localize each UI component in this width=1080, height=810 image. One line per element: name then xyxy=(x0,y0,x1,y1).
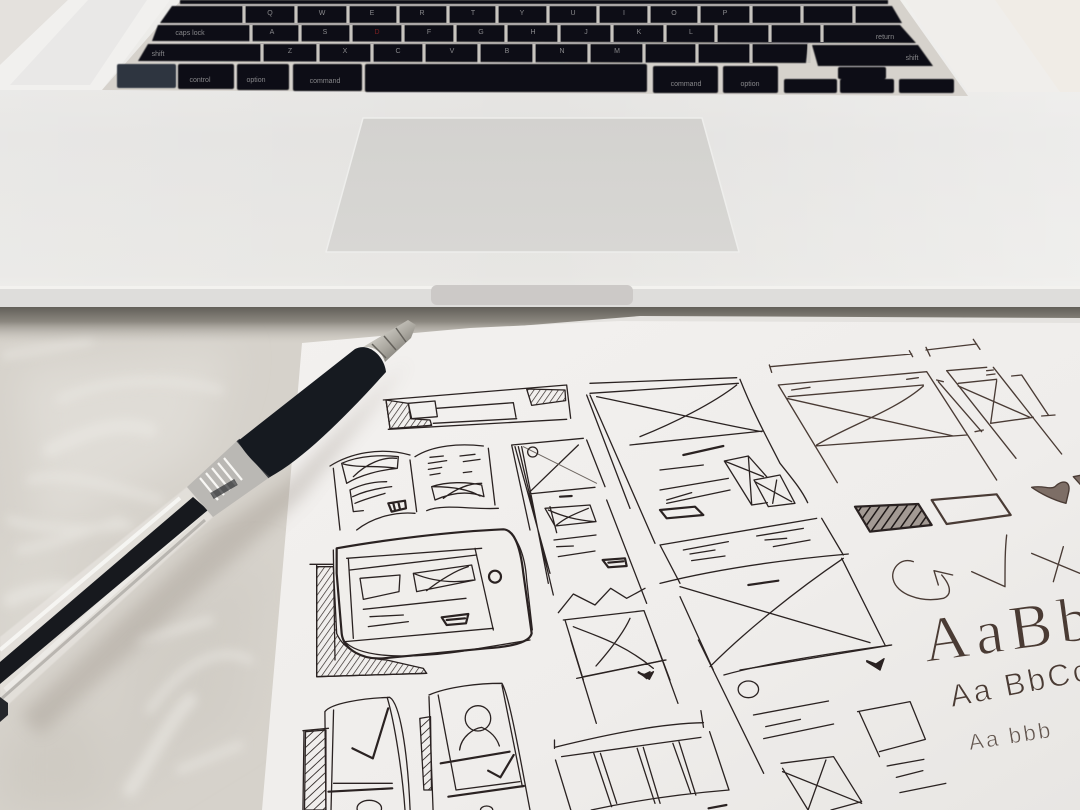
key labels: caps lock xyxy=(175,30,205,37)
key labels: P xyxy=(723,10,728,17)
type specimen: small: Aa bbb xyxy=(967,717,1054,755)
key labels: option xyxy=(246,77,266,84)
key labels: R xyxy=(419,10,425,17)
icon: check mark xyxy=(972,535,1007,587)
pen with shadow xyxy=(0,320,416,735)
key labels: U xyxy=(570,10,576,17)
sketches: bottom row xyxy=(303,640,946,810)
key labels: D xyxy=(374,29,380,36)
laptop body xyxy=(0,0,1080,307)
key labels: J xyxy=(584,29,588,36)
key labels: C xyxy=(395,48,401,55)
key labels: shift xyxy=(152,51,164,58)
sketch: mobile page column xyxy=(512,438,670,680)
keyboard xyxy=(102,0,968,96)
key labels: B xyxy=(505,48,510,55)
pen: clear barrel xyxy=(0,487,213,712)
icon: heart xyxy=(1032,475,1080,503)
key labels: T xyxy=(471,10,476,17)
key labels: Y xyxy=(520,10,525,17)
table surface xyxy=(0,305,1080,810)
key labels: shift xyxy=(906,55,918,62)
key labels: A xyxy=(270,29,275,36)
key labels: F xyxy=(427,29,431,36)
trackpad xyxy=(326,118,739,252)
key labels: I xyxy=(623,10,625,17)
key labels: O xyxy=(671,10,677,17)
key labels: E xyxy=(370,10,375,17)
sketches: left column xyxy=(310,385,670,680)
key labels: Z xyxy=(288,48,293,55)
icon: rotate arrow xyxy=(893,561,953,600)
key labels: W xyxy=(319,10,326,17)
key labels: return xyxy=(876,34,894,41)
key labels: command xyxy=(671,81,701,88)
key labels: N xyxy=(559,48,565,55)
pen: metal tip xyxy=(363,320,416,362)
key labels: X xyxy=(343,48,348,55)
key labels: M xyxy=(614,48,620,55)
key labels: control xyxy=(189,77,211,84)
icon: cross xyxy=(1032,547,1080,582)
key labels: V xyxy=(450,48,455,55)
key labels: command xyxy=(310,78,340,85)
pen: clear ribbed section xyxy=(187,440,270,517)
icon: empty rectangle xyxy=(932,494,1011,524)
key labels xyxy=(152,10,918,88)
paper sheet with wireframe sketches xyxy=(262,316,1080,810)
key labels: option xyxy=(740,81,760,88)
sketches: right column xyxy=(590,339,1080,670)
key labels: H xyxy=(530,29,536,36)
pen: rubber grip xyxy=(238,347,386,477)
icon: hatched rectangle xyxy=(855,504,932,532)
pen: ink rod xyxy=(0,497,208,684)
sketch: tablet wireframe xyxy=(317,567,427,677)
key labels: Q xyxy=(267,10,273,17)
lid notch xyxy=(431,285,633,305)
key labels: L xyxy=(689,29,693,36)
key labels: S xyxy=(323,29,328,36)
key labels: K xyxy=(637,29,642,36)
key labels: G xyxy=(478,29,484,36)
pen: end cap xyxy=(0,697,8,722)
